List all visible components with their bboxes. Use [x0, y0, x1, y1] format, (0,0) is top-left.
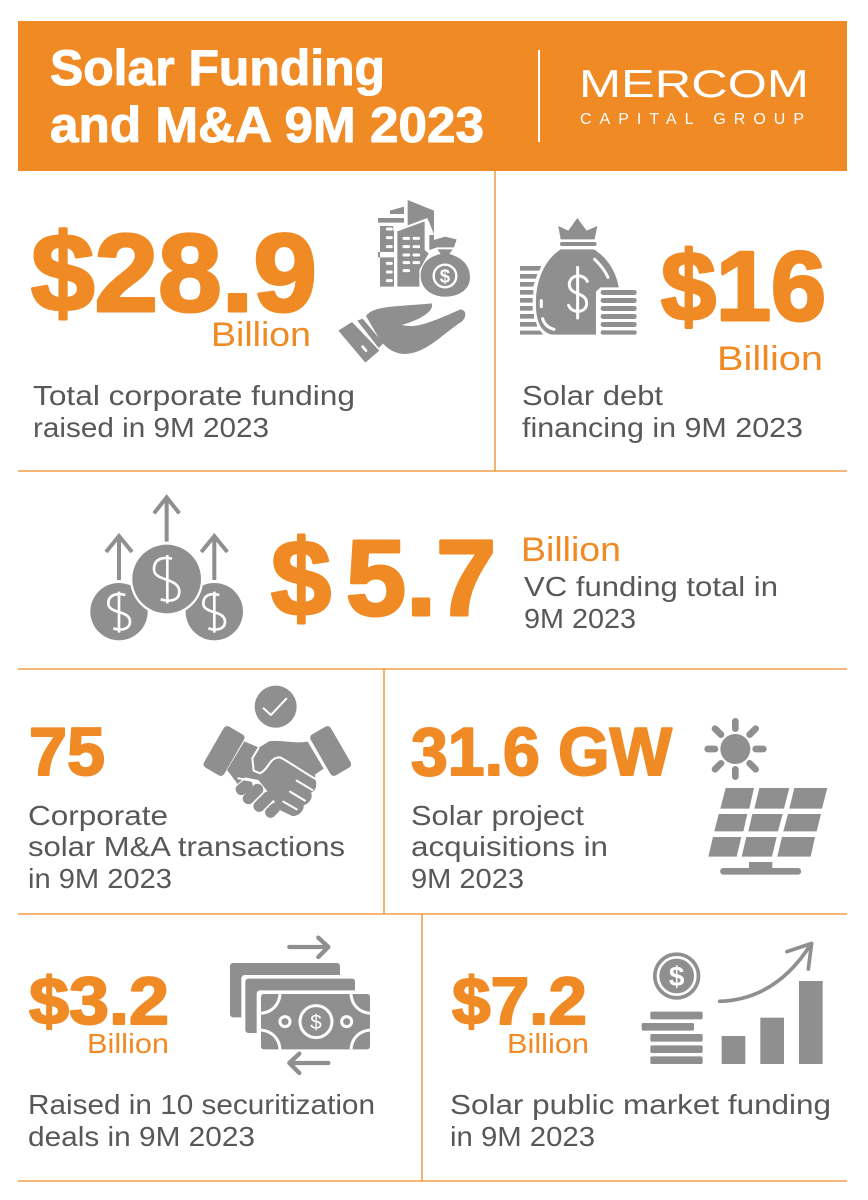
- figure: $28.9 Billion: Billion: [211, 316, 311, 354]
- caption: 9M 2023: [411, 863, 524, 894]
- panel: VC funding: [90, 497, 778, 640]
- caption: Solar public market funding: [450, 1089, 831, 1120]
- icon: handshake with check badge: [202, 686, 353, 820]
- panel: solar project acquisitions: [411, 714, 827, 894]
- caption: [33, 380, 355, 443]
- icon: banknotes with exchange arrows: [230, 938, 370, 1073]
- panel: solar debt financing: [520, 218, 826, 443]
- figure: 31.6 GW: 31.6 GW: [411, 714, 673, 790]
- figure: $7.2 Billion: Billion: [507, 1028, 589, 1059]
- panel: corporate M&A transactions: [28, 686, 353, 894]
- caption: acquisitions in: [411, 831, 608, 862]
- title: and M&A 9M 2023: [50, 97, 484, 153]
- logo: Mercom Capital Group: MERCOM: [579, 63, 809, 106]
- icon: banknotes with exchange arrows: $: [310, 1011, 322, 1034]
- icon: hand holding buildings and money bag: $: [440, 266, 451, 287]
- caption: Solar debt: [522, 380, 663, 411]
- caption: raised in 9M 2023: [33, 412, 269, 443]
- title: Solar Funding: [50, 40, 385, 96]
- figure: $3.2 Billion: Billion: [87, 1028, 169, 1059]
- label and caption: [521, 531, 778, 634]
- caption: [522, 380, 803, 443]
- icon: sun and solar panel: [708, 721, 827, 875]
- label and caption: Billion: [521, 531, 621, 569]
- figure: $3.2 Billion: $3.2: [29, 964, 169, 1039]
- figure: $28.9 Billion: $28.9: [31, 212, 317, 335]
- icon: coin stack and rising bar chart: $: [669, 961, 685, 992]
- caption: solar M&A transactions: [28, 831, 345, 862]
- logo: Mercom Capital Group: [579, 63, 809, 128]
- panel: total corporate funding: [31, 200, 470, 443]
- figure: $5.7: 5.7: [346, 517, 496, 638]
- caption: in 9M 2023: [28, 863, 172, 894]
- figure: $7.2 Billion: $7.2: [452, 964, 587, 1039]
- figure: $16 Billion: Billion: [717, 340, 823, 378]
- caption: Corporate: [28, 800, 168, 831]
- caption: Solar project: [411, 800, 584, 831]
- caption: [28, 800, 345, 894]
- caption: [411, 800, 608, 894]
- logo: Mercom Capital Group: CAPITAL GROUP: [580, 111, 804, 128]
- figure: 75: 75: [29, 714, 105, 790]
- caption: deals in 9M 2023: [28, 1121, 255, 1152]
- header banner: [18, 21, 847, 171]
- title: [50, 40, 484, 153]
- label and caption: 9M 2023: [524, 603, 636, 634]
- panel: public market funding: [450, 943, 831, 1152]
- icon: hand holding buildings and money bag: [338, 200, 470, 363]
- icon: coins with up arrows: [90, 497, 243, 640]
- caption: in 9M 2023: [450, 1121, 595, 1152]
- caption: Total corporate funding: [33, 380, 355, 411]
- label and caption: VC funding total in: [524, 571, 778, 602]
- figure: $5.7: $: [271, 517, 331, 638]
- figure: $16 Billion: $16: [661, 231, 826, 341]
- caption: Raised in 10 securitization: [28, 1089, 375, 1120]
- caption: [450, 1089, 831, 1152]
- icon: money bag with crown and coin stacks: [520, 218, 637, 335]
- caption: financing in 9M 2023: [522, 412, 803, 443]
- icon: coin stack and rising bar chart: [642, 943, 823, 1064]
- caption: [28, 1089, 375, 1152]
- panel: securitization deals: [28, 938, 375, 1152]
